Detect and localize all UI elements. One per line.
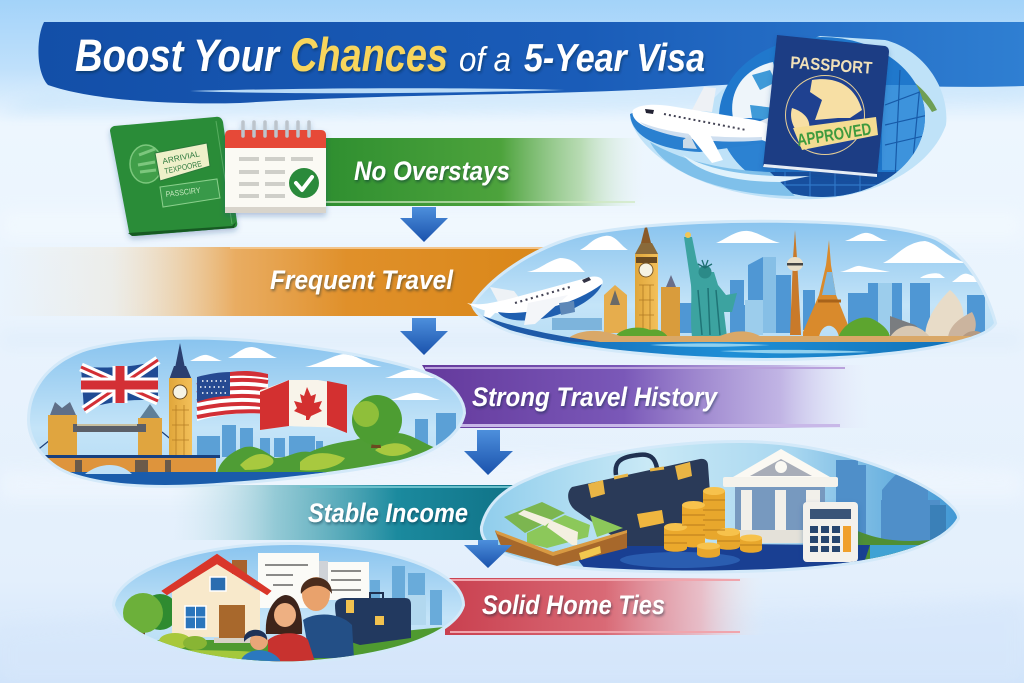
passport bbox=[763, 35, 889, 177]
arrow 2 bbox=[400, 318, 448, 355]
ground and water bbox=[570, 331, 990, 342]
bank bbox=[723, 449, 838, 543]
skyline bbox=[370, 566, 442, 625]
tower bridge bbox=[39, 432, 169, 449]
skyline bbox=[197, 425, 323, 457]
globe bbox=[715, 35, 930, 200]
Canada flag bbox=[260, 380, 347, 433]
statue of liberty bbox=[684, 232, 737, 337]
ground bbox=[578, 544, 870, 570]
house bbox=[172, 590, 260, 637]
skyline bbox=[836, 460, 940, 545]
big ben bbox=[641, 227, 651, 243]
passport: APPROVED bbox=[796, 119, 873, 150]
plane bbox=[467, 277, 603, 325]
label: No Overstays bbox=[354, 156, 510, 186]
title words: of a: of a bbox=[459, 41, 511, 79]
title word: Chances: Chances bbox=[290, 28, 448, 81]
clouds bbox=[527, 231, 980, 282]
label: Solid Home Ties bbox=[482, 590, 665, 620]
arrow 4 bbox=[464, 540, 512, 568]
icon: green passport: ARRIVIAL bbox=[162, 149, 201, 166]
big ben bbox=[175, 343, 185, 368]
tree bbox=[371, 444, 381, 448]
icon: green passport: TEXPOORE bbox=[164, 159, 203, 176]
bushes bbox=[217, 433, 434, 474]
eiffel tower bbox=[803, 240, 849, 337]
arrow 3 bbox=[464, 430, 513, 475]
skyline bbox=[672, 257, 985, 335]
orange band: Frequent Travel bbox=[0, 247, 560, 316]
swooshes bbox=[650, 142, 795, 196]
halo bbox=[630, 36, 946, 199]
UK flag bbox=[81, 360, 158, 410]
title text: Boost Your bbox=[75, 30, 281, 81]
icon: calendar bbox=[225, 122, 326, 213]
passport: PASSPORT bbox=[790, 53, 873, 78]
opera house bbox=[890, 316, 920, 336]
icon: green passport: PASSCIRY bbox=[165, 186, 202, 199]
tower right bbox=[666, 275, 676, 287]
icon: green passport bbox=[110, 117, 237, 236]
documents bbox=[258, 553, 319, 608]
arrow 1 bbox=[400, 207, 448, 242]
bushes bbox=[838, 318, 890, 336]
label: Strong Travel History bbox=[472, 382, 719, 412]
hill bbox=[858, 531, 930, 560]
scene: world landmarks bbox=[460, 218, 1000, 365]
tree bbox=[138, 630, 145, 634]
family bbox=[241, 577, 354, 664]
calculator bbox=[803, 502, 858, 562]
scene: flags and city bbox=[25, 335, 470, 492]
cash tray bbox=[495, 502, 627, 566]
coin stacks bbox=[664, 487, 762, 558]
scene: home and family bbox=[110, 540, 470, 670]
parliament bbox=[604, 285, 627, 333]
cn tower bbox=[790, 230, 801, 335]
red band: Solid Home Ties bbox=[445, 578, 765, 635]
plane bbox=[632, 87, 784, 163]
US flag bbox=[197, 371, 268, 421]
title banner bbox=[0, 22, 1024, 112]
teal band: Stable Income bbox=[170, 485, 520, 540]
scene: income and assets bbox=[480, 440, 960, 575]
label: Stable Income bbox=[308, 498, 468, 528]
briefcase bbox=[568, 455, 712, 546]
clouds bbox=[190, 347, 440, 400]
title words: 5-Year Visa: 5-Year Visa bbox=[524, 37, 705, 80]
label: Frequent Travel bbox=[270, 265, 453, 295]
green band: No Overstays bbox=[325, 138, 645, 206]
icon: globe with passport and plane bbox=[630, 35, 946, 200]
purple band: Strong Travel History bbox=[422, 365, 870, 428]
ground bbox=[157, 627, 443, 662]
briefcase bbox=[370, 593, 383, 598]
